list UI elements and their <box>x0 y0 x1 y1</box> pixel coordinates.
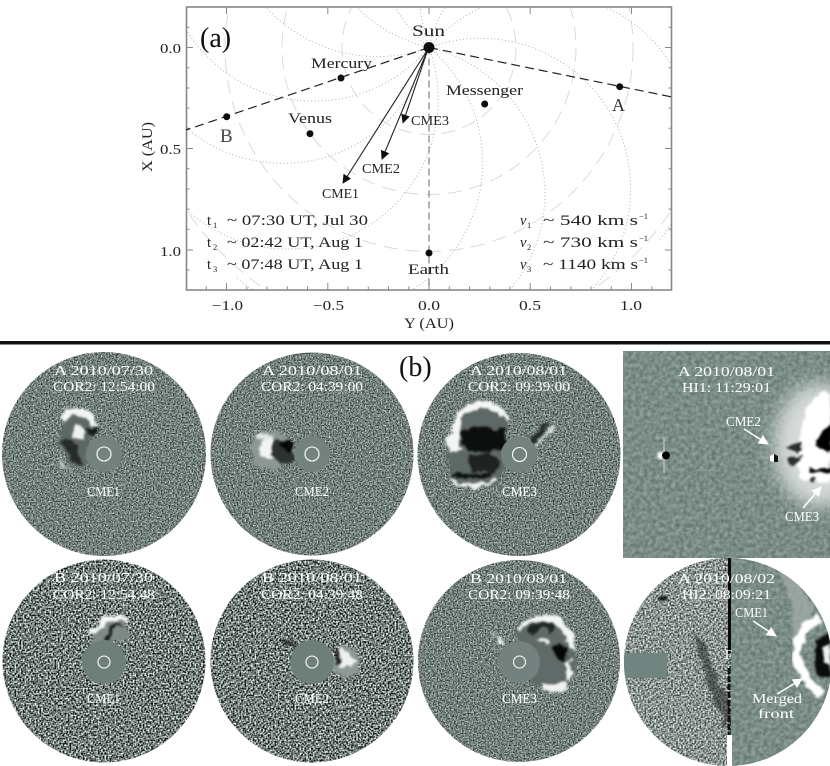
axis tick labels: 0.0 <box>160 42 181 57</box>
caption text: F <box>725 648 732 663</box>
caption text: CME3 <box>502 692 537 707</box>
spacecraft alignment lines <box>186 48 672 290</box>
CME speeds: −1 <box>639 255 648 265</box>
CME speeds: ~ 730 km s <box>543 235 639 251</box>
plot frame and ticks <box>186 7 672 290</box>
caption text: HI2: 08:09:21 <box>682 588 771 603</box>
caption text: COR2: 09:39:00 <box>468 380 570 395</box>
panel: HI1-A image <box>623 351 830 558</box>
caption text: HI1: 11:29:01 <box>682 381 771 396</box>
panel: COR2-A CME3 <box>416 350 622 558</box>
CME launch times: t <box>207 235 211 251</box>
body labels: Messenger <box>446 83 523 99</box>
caption text: CME3 <box>502 485 537 500</box>
body labels: CME3 <box>411 113 449 128</box>
caption text: A 2010/08/01 <box>262 364 362 379</box>
CME launch times: t <box>207 257 211 273</box>
caption text: CME2 <box>726 415 761 430</box>
body labels <box>220 23 625 278</box>
caption text: Merged <box>752 692 802 707</box>
caption text <box>468 572 570 707</box>
icon: star bleed <box>657 437 670 473</box>
axis tick labels: 1.0 <box>620 299 642 314</box>
caption text <box>261 571 363 707</box>
body labels: CME1 <box>322 186 359 201</box>
CME launch times: 2 <box>213 242 217 252</box>
CME speeds: 2 <box>527 242 531 252</box>
CME speeds: 1 <box>527 220 531 230</box>
arrow: CME3 <box>803 487 821 508</box>
CME speeds: ~ 540 km s <box>543 213 639 229</box>
CME speeds: 3 <box>527 264 531 274</box>
body labels: Venus <box>288 111 332 127</box>
panel: (a) heliocentric position plot <box>142 6 672 332</box>
caption text <box>53 364 155 500</box>
CME launch times: ~ 07:30 UT, Jul 30 <box>227 213 368 229</box>
caption text: COR2: 12:54:00 <box>53 380 155 395</box>
CME speeds: −1 <box>639 211 648 221</box>
CME speeds: ~ 1140 km s <box>543 257 638 273</box>
axis tick labels: 0.5 <box>160 143 181 158</box>
planets and spacecraft markers <box>223 42 623 256</box>
CME launch times: ~ 02:42 UT, Aug 1 <box>227 235 363 251</box>
CME direction arrows <box>343 49 428 183</box>
body labels: A <box>612 95 625 115</box>
caption text: COR2: 04:39:48 <box>261 588 363 603</box>
separator between panels <box>0 341 830 344</box>
CME launch times: t <box>207 213 211 229</box>
CME launch times <box>207 213 368 274</box>
caption text: COR2: 04:39:00 <box>261 380 363 395</box>
panel label (a): (a) <box>200 23 231 54</box>
CME speeds <box>520 211 648 274</box>
axis tick labels <box>160 42 642 314</box>
orbits and Parker spirals <box>187 8 671 290</box>
caption text: CME3 <box>785 510 819 525</box>
body labels: Mercury <box>311 56 373 72</box>
caption text <box>261 364 363 500</box>
CME speeds: v <box>520 235 527 251</box>
caption text: COR2: 09:39:48 <box>468 588 570 603</box>
caption text <box>468 364 570 500</box>
axis title: X (AU): X (AU) <box>140 122 156 172</box>
CME launch times: 3 <box>213 264 217 274</box>
body labels: Earth <box>408 262 450 278</box>
body labels: B <box>220 126 233 147</box>
panel: COR2-A CME1 <box>0 350 208 558</box>
caption text: CME1 <box>87 692 120 707</box>
caption text: B 2010/08/01 <box>470 572 567 587</box>
axis tick labels: 0.5 <box>519 299 541 314</box>
caption text: front <box>758 707 794 722</box>
caption text: COR2: 12:54:48 <box>53 588 155 603</box>
panel: HI2-A image <box>623 558 830 766</box>
caption text: B 2010/07/30 <box>54 571 153 586</box>
panel label (b): (b) <box>399 352 432 383</box>
caption text: A 2010/08/01 <box>470 364 567 379</box>
CME launch times: 1 <box>213 220 217 230</box>
body labels: Sun <box>412 23 445 40</box>
CME speeds: −1 <box>639 233 648 243</box>
panel: COR2-A CME2 <box>208 350 416 558</box>
caption text: CME1 <box>87 485 120 500</box>
arrow: merged front <box>777 679 802 694</box>
caption text <box>678 365 819 525</box>
axis tick labels: 0.0 <box>418 299 440 314</box>
icon: small star bleed <box>770 454 778 462</box>
CME speeds: v <box>520 213 527 229</box>
arrow: CME1 <box>753 621 776 636</box>
axis title: Y (AU): Y (AU) <box>404 316 454 332</box>
axis tick labels: −1.0 <box>212 299 243 314</box>
caption text: CME1 <box>735 606 768 621</box>
caption text: B 2010/08/01 <box>262 571 362 586</box>
axis tick labels: −0.5 <box>313 299 344 314</box>
caption text: A 2010/08/01 <box>678 365 775 380</box>
panel: COR2-B CME2 <box>208 558 416 766</box>
caption text: A 2010/07/30 <box>54 364 153 379</box>
CME speeds: v <box>520 257 527 273</box>
caption text: CME2 <box>295 692 329 707</box>
caption text: A 2010/08/02 <box>678 572 775 587</box>
panel: COR2-B CME3 <box>416 558 622 766</box>
CME launch times: ~ 07:48 UT, Aug 1 <box>227 257 363 273</box>
axis tick labels: 1.0 <box>160 245 181 260</box>
panel: COR2-B CME1 <box>0 558 208 766</box>
body labels: CME2 <box>362 161 400 176</box>
caption text <box>53 571 155 707</box>
caption text: CME2 <box>295 485 329 500</box>
arrow: CME2 <box>744 429 768 444</box>
caption text <box>678 572 802 722</box>
